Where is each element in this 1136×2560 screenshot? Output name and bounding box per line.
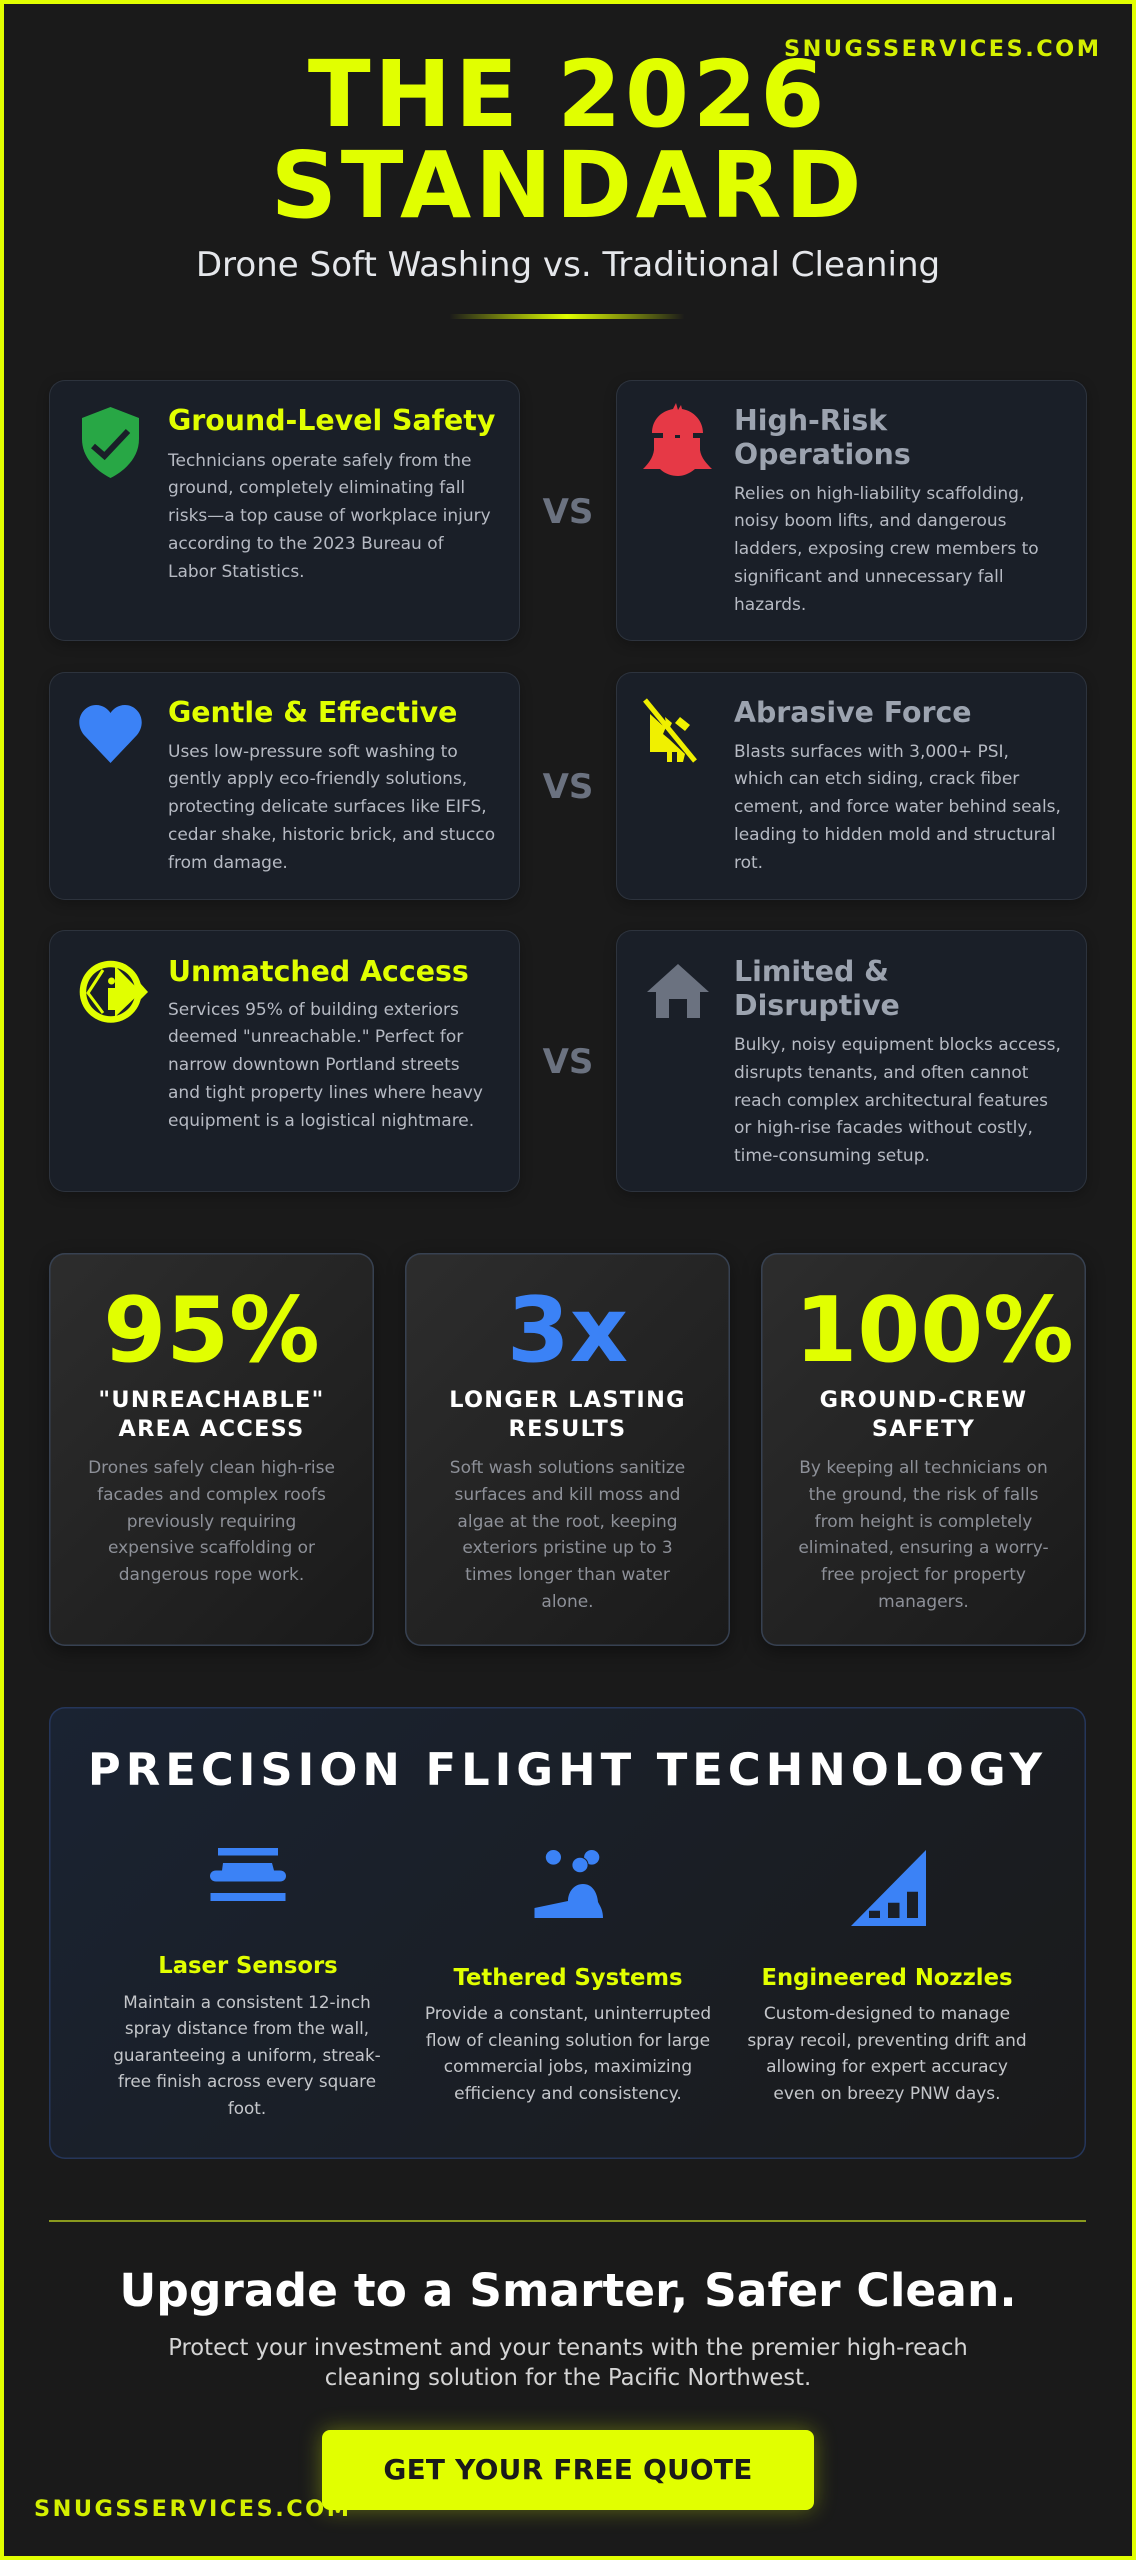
panel: limited and disruptive [616, 930, 1087, 1192]
panel: ground-level safety [49, 380, 520, 641]
title: THE 2026 [308, 41, 828, 148]
description: Relies on high-liability scaffolding, [734, 484, 1024, 504]
description: risks—a top cause of workplace injury [168, 506, 491, 526]
icon: compass target [80, 960, 148, 1023]
panel: abrasive force [616, 672, 1087, 900]
description: spray recoil, preventing drift and [747, 2031, 1027, 2051]
heading: High-Risk [734, 404, 887, 437]
stat description: eliminated, ensuring a worry- [798, 1538, 1049, 1558]
stat number: 95% [103, 1278, 320, 1383]
stat description: from height is completely [815, 1512, 1032, 1532]
description: hazards. [734, 595, 806, 615]
description: leading to hidden mold and structural [734, 825, 1056, 845]
header [196, 36, 1101, 319]
tech: engineered nozzles [747, 1850, 1027, 2104]
description: Provide a constant, uninterrupted [425, 2004, 711, 2024]
icon: shield check [82, 407, 139, 478]
description: narrow downtown Portland streets [168, 1055, 460, 1075]
description: Maintain a consistent 12-inch [123, 1992, 371, 2012]
description: Bulky, noisy equipment blocks access, [734, 1035, 1061, 1055]
description [747, 2004, 1027, 2104]
stat description: the ground, the risk of falls [809, 1485, 1038, 1505]
heading [734, 954, 900, 1022]
icon: tether spray [534, 1850, 603, 1918]
cta text: cleaning solution for the Pacific Northwest. [325, 2364, 811, 2390]
stat label: LONGER LASTING [449, 1386, 686, 1412]
panel: precision flight technology [49, 1707, 1086, 2159]
stat description: facades and complex roofs [97, 1485, 326, 1505]
stat description: managers. [878, 1592, 969, 1612]
heading: Gentle & Effective [168, 696, 457, 728]
stat description: free project for property [821, 1565, 1026, 1585]
description: foot. [228, 2098, 266, 2118]
description: or high-rise facades without costly, [734, 1118, 1033, 1138]
description: according to the 2023 Bureau of [168, 534, 444, 554]
stat description: Drones safely clean high-rise [88, 1458, 335, 1478]
description: Blasts surfaces with 3,000+ PSI, [734, 742, 1009, 762]
tech: laser sensors [113, 1848, 381, 2118]
cta heading: Upgrade to a Smarter, Safer Clean. [119, 2264, 1017, 2316]
stat description: alone. [541, 1592, 594, 1612]
heading: Limited & [734, 954, 889, 988]
heading: Abrasive Force [734, 696, 972, 728]
stat description: exteriors pristine up to 3 [462, 1538, 673, 1558]
vs label row 2: VS [543, 766, 593, 806]
cta text: Protect your investment and your tenants with the premier high-reach [168, 2334, 968, 2360]
title [271, 41, 865, 239]
description: Labor Statistics. [168, 562, 305, 582]
stat description: algae at the root, keeping [457, 1512, 678, 1532]
description: gently apply eco-friendly solutions, [168, 769, 467, 789]
vs label row 1: VS [543, 492, 593, 532]
description: equipment is a logistical nightmare. [168, 1111, 474, 1131]
stat card: 100% [761, 1253, 1086, 1646]
description [168, 450, 491, 582]
stat number: 100% [794, 1278, 1074, 1383]
description: noisy boom lifts, and dangerous [734, 511, 1007, 531]
description [734, 742, 1061, 873]
vs label row 3: VS [543, 1042, 593, 1082]
cta text [168, 2334, 968, 2390]
description: and tight property lines where heavy [168, 1083, 483, 1103]
stat description [450, 1458, 685, 1612]
stat label [820, 1386, 1027, 1442]
description: allowing for expert accuracy [766, 2057, 1008, 2077]
description: Custom-designed to manage [764, 2004, 1010, 2024]
stat description: By keeping all technicians on [799, 1458, 1048, 1478]
stat description [88, 1458, 335, 1585]
description: efficiency and consistency. [454, 2084, 682, 2104]
description: disrupts tenants, and often cannot [734, 1063, 1028, 1083]
description: time-consuming setup. [734, 1146, 930, 1166]
heading: Operations [734, 438, 911, 471]
stat label: GROUND-CREW [820, 1386, 1027, 1412]
description [734, 1035, 1061, 1166]
description: free finish across every square [118, 2071, 376, 2091]
stat description [798, 1458, 1049, 1612]
divider [49, 2220, 1086, 2222]
description: spray distance from the wall, [125, 2018, 369, 2038]
stat description: previously requiring [127, 1512, 296, 1532]
icon: hard hat [643, 403, 712, 476]
description [113, 1992, 381, 2118]
subtitle: Drone Soft Washing vs. Traditional Cleaning [196, 245, 940, 285]
icon: laser sensor [210, 1848, 286, 1901]
description: guaranteeing a uniform, streak- [113, 2045, 381, 2065]
stat description: dangerous rope work. [119, 1565, 304, 1585]
tech: tethered systems [425, 1850, 711, 2104]
call to action [34, 2220, 1086, 2522]
stat description: surfaces and kill moss and [455, 1485, 680, 1505]
stat label: AREA ACCESS [118, 1416, 305, 1442]
description [168, 1000, 483, 1131]
description: from damage. [168, 853, 288, 873]
icon: heart [79, 705, 142, 763]
stat label [449, 1386, 686, 1442]
description [168, 742, 495, 873]
description: cedar shake, historic brick, and stucco [168, 825, 495, 845]
panel: high-risk operations [616, 380, 1087, 641]
description: protecting delicate surfaces like EIFS, [168, 797, 487, 817]
heading [734, 404, 911, 471]
button [322, 2430, 814, 2510]
description: even on breezy PNW days. [773, 2084, 1001, 2104]
heading: Engineered Nozzles [762, 1964, 1012, 1990]
description: commercial jobs, maximizing [444, 2057, 692, 2077]
title underline glow [449, 314, 685, 319]
stat card: 3x [405, 1253, 730, 1646]
panel: unmatched access [49, 930, 520, 1192]
stat label: "UNREACHABLE" [98, 1386, 325, 1412]
title: STANDARD [271, 132, 865, 239]
description: cement, and force water behind seals, [734, 797, 1061, 817]
stat description: expensive scaffolding or [108, 1538, 315, 1558]
icon: crossed-out pressure washer [643, 698, 697, 763]
stat label [98, 1386, 325, 1442]
heading: Disruptive [734, 988, 900, 1022]
description: deemed "unreachable." Perfect for [168, 1027, 463, 1047]
website label bottom: SNUGSSERVICES.COM [34, 2496, 351, 2522]
description: Services 95% of building exteriors [168, 1000, 459, 1020]
description: Technicians operate safely from the [168, 450, 471, 470]
description: flow of cleaning solution for large [426, 2031, 710, 2051]
panel: gentle and effective [49, 672, 520, 900]
stat number: 3x [507, 1278, 628, 1383]
stat description: times longer than water [465, 1565, 670, 1585]
description [425, 2004, 711, 2104]
description: ground, completely eliminating fall [168, 478, 465, 498]
heading: Laser Sensors [158, 1952, 338, 1978]
stat description: Soft wash solutions sanitize [450, 1458, 685, 1478]
heading: Tethered Systems [454, 1964, 682, 1990]
button: GET YOUR FREE QUOTE [383, 2453, 753, 2486]
heading: Ground-Level Safety [168, 404, 495, 436]
description: reach complex architectural features [734, 1091, 1048, 1111]
website label top: SNUGSSERVICES.COM [784, 36, 1101, 62]
description: rot. [734, 853, 763, 873]
heading: Unmatched Access [168, 954, 469, 988]
description: Uses low-pressure soft washing to [168, 742, 458, 762]
description: significant and unnecessary fall [734, 567, 1004, 587]
stat label: SAFETY [872, 1416, 975, 1442]
description [734, 484, 1039, 615]
stat card: 95% [49, 1253, 374, 1646]
icon: house [647, 964, 709, 1018]
description: ladders, exposing crew members to [734, 539, 1039, 559]
section heading: PRECISION FLIGHT TECHNOLOGY [88, 1742, 1047, 1796]
description: which can etch siding, crack fiber [734, 769, 1019, 789]
icon: nozzle signal [851, 1850, 926, 1926]
stat label: RESULTS [509, 1416, 626, 1442]
